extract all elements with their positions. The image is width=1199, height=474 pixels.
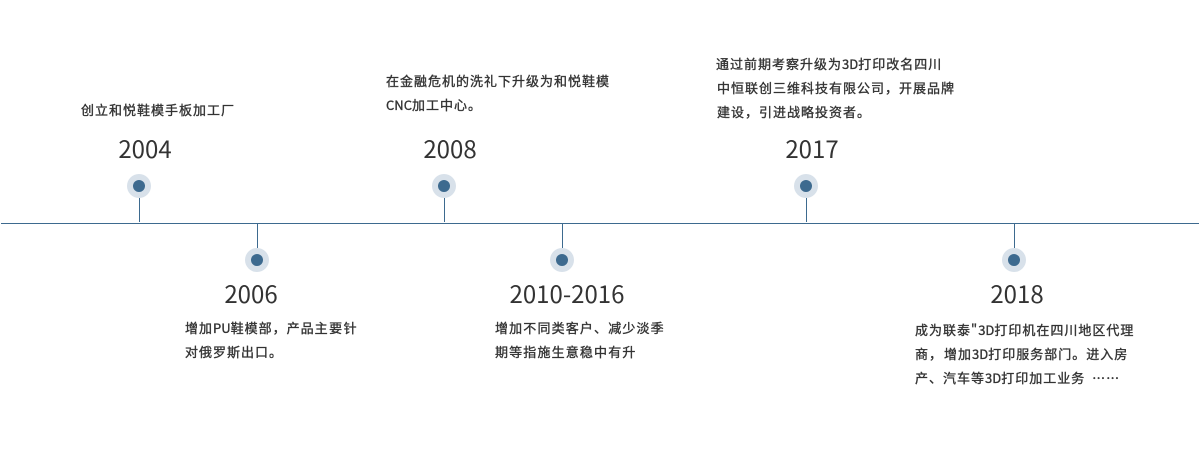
- milestone 2010-2016 description: 增加不同类客户、减少淡季: [495, 318, 665, 337]
- milestone 2018 description: 成为联泰"3D打印机在四川地区代理: [915, 320, 1134, 339]
- milestone 2010-2016 dot: [550, 248, 574, 272]
- milestone 2018 year: 2018: [990, 275, 1044, 310]
- milestone 2017 description: 中恒联创三维科技有限公司，开展品牌: [717, 78, 955, 97]
- milestone 2004 stem: [139, 198, 140, 222]
- milestone 2017 dot: [794, 174, 818, 198]
- milestone 2004 description: 创立和悦鞋模手板加工厂: [81, 100, 235, 119]
- milestone 2010-2016 description: 期等指施生意稳中有升: [495, 342, 637, 361]
- milestone 2006 description: [185, 318, 358, 361]
- milestone 2008 year: 2008: [423, 130, 477, 165]
- milestone 2004 dot: [127, 174, 151, 198]
- milestone 2017 description: [716, 54, 955, 121]
- milestone 2010-2016 stem: [562, 224, 563, 248]
- milestone 2008 description: 在金融危机的洗礼下升级为和悦鞋模: [386, 71, 610, 90]
- milestone 2010-2016 year: 2010-2016: [510, 275, 624, 310]
- timeline axis: [1, 223, 1199, 224]
- milestone 2018 dot: [1002, 248, 1026, 272]
- milestone 2018 description: 产、汽车等3D打印加工业务 ……: [915, 368, 1120, 387]
- milestone 2017 year: 2017: [785, 130, 839, 165]
- milestone 2008 stem: [444, 198, 445, 222]
- milestone 2006 description: 增加PU鞋模部，产品主要针: [185, 318, 358, 337]
- milestone 2006 description: 对俄罗斯出口。: [185, 342, 283, 361]
- milestone 2008 dot: [432, 174, 456, 198]
- milestone 2008 description: [386, 71, 610, 114]
- milestone 2017 description: 建设，引进战略投资者。: [717, 102, 871, 121]
- milestone 2010-2016 description: [495, 318, 665, 361]
- milestone 2017 description: 通过前期考察升级为3D打印改名四川: [716, 54, 942, 73]
- milestone 2018 description: 商，增加3D打印服务部门。进入房: [915, 344, 1128, 363]
- milestone 2017 stem: [806, 198, 807, 222]
- milestone 2018 description: [915, 320, 1134, 387]
- milestone 2018 stem: [1014, 224, 1015, 248]
- milestone 2006 stem: [257, 224, 258, 248]
- milestone 2008 description: CNC加工中心。: [386, 95, 482, 114]
- milestone 2006 dot: [245, 248, 269, 272]
- milestone 2004 year: 2004: [118, 130, 172, 165]
- milestone 2006 year: 2006: [224, 275, 278, 310]
